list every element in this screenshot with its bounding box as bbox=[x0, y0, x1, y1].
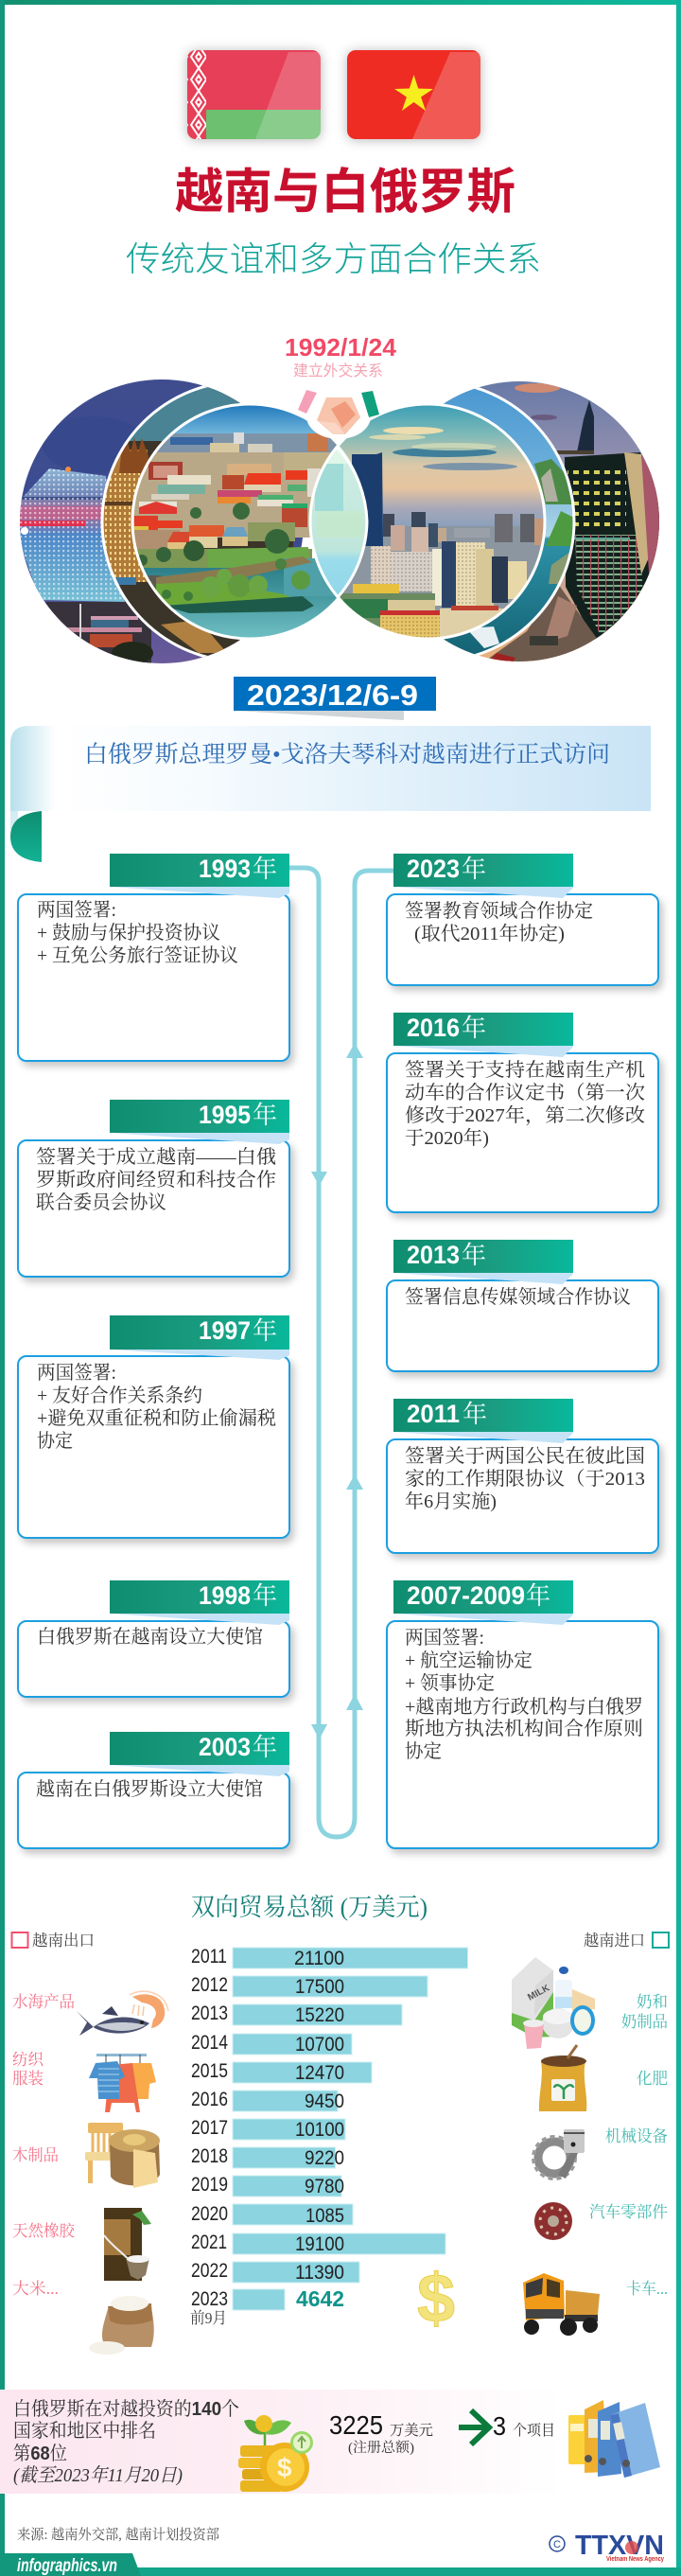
timeline 1997: 1997 bbox=[199, 1316, 251, 1345]
timeline 2011: 2011 bbox=[407, 1400, 460, 1428]
icon: clothes on rack bbox=[89, 2054, 156, 2112]
timeline 2011: 年6月实施) bbox=[405, 1491, 497, 1512]
chart title: two-way trade: 双向贸易总额 (万美元) bbox=[191, 1894, 428, 1921]
timeline 1997: + 友好合作关系条约 bbox=[37, 1385, 202, 1406]
timeline 2016: 年 bbox=[462, 1015, 486, 1042]
caption: establishing diplomatic relations: 建立外交关系 bbox=[293, 362, 383, 379]
bar chart: trade by year: 12470 bbox=[295, 2062, 344, 2084]
timeline 2023: 2023 bbox=[407, 855, 460, 883]
icon: fertilizer sack bbox=[539, 2045, 586, 2111]
timeline 2011: 年 bbox=[463, 1401, 487, 1428]
investment ranking text: 白俄罗斯在对越投资的140个 bbox=[13, 2398, 239, 2420]
flag: Belarus bbox=[187, 50, 321, 139]
timeline 2013 bbox=[387, 1240, 658, 1371]
timeline 1997: +避免双重征税和防止偷漏税 bbox=[37, 1407, 276, 1429]
import labels: 奶制品 bbox=[621, 2013, 668, 2031]
icon: dollar sign: $ bbox=[417, 2261, 455, 2337]
bar chart: trade by year: 9780 bbox=[305, 2176, 344, 2197]
timeline arrow line bbox=[289, 868, 393, 1837]
title: 越南与白俄罗斯 bbox=[175, 165, 515, 219]
bar chart: trade by year: 4642 bbox=[296, 2286, 344, 2311]
timeline 2007-2009: 两国签署: bbox=[405, 1627, 484, 1649]
timeline 1997: 年 bbox=[253, 1317, 277, 1345]
investment ranking text: (截至2023年11月20日) bbox=[13, 2464, 183, 2486]
bar chart: trade by year: 2012 bbox=[191, 1974, 228, 1996]
bar chart: trade by year bbox=[190, 1946, 467, 2327]
icon: binders bbox=[568, 2400, 660, 2478]
registered capital: (注册总额) bbox=[348, 2440, 414, 2456]
timeline 1995: 签署关于成立越南——白俄 bbox=[36, 1146, 276, 1168]
timeline 2023: (取代2011年协定) bbox=[414, 923, 565, 944]
timeline 1998: 白俄罗斯在越南设立大使馆 bbox=[37, 1626, 263, 1648]
timeline 1997: 协定 bbox=[37, 1430, 73, 1452]
timeline 2007-2009: +越南地方行政机构与白俄罗 bbox=[405, 1696, 643, 1718]
investment ranking text bbox=[13, 2398, 239, 2486]
logo: TTXVN: C bbox=[553, 2539, 561, 2550]
timeline 1993 bbox=[18, 854, 289, 1061]
bar chart: trade by year: 9450 bbox=[305, 2091, 344, 2112]
icon: handshake bbox=[298, 390, 379, 439]
export labels: 木制品 bbox=[12, 2146, 59, 2164]
bar chart: trade by year: 2019 bbox=[191, 2174, 228, 2196]
import labels: 机械设备 bbox=[605, 2127, 668, 2145]
legend: Vietnam exports: 越南出口 bbox=[32, 1932, 95, 1950]
timeline 2007-2009: 年 bbox=[526, 1582, 550, 1610]
bar chart: trade by year: 2020 bbox=[191, 2203, 228, 2225]
photo: lit Minsk building bbox=[100, 386, 293, 657]
date badge 2023/12/6-9: 2023/12/6-9 bbox=[247, 679, 418, 712]
bar chart: trade by year: 19100 bbox=[295, 2233, 344, 2255]
timeline 1997: 两国签署: bbox=[37, 1362, 116, 1384]
timeline 2007-2009: + 领事协定 bbox=[405, 1672, 495, 1694]
icon: wooden chair and stump bbox=[85, 2123, 160, 2188]
project count: 个项目 bbox=[513, 2422, 555, 2439]
timeline 2016: 动车的合作议定书（第一次 bbox=[405, 1082, 645, 1103]
bar chart: trade by year: 2015 bbox=[191, 2060, 228, 2082]
source note: 来源: 越南外交部, 越南计划投资部 bbox=[17, 2526, 219, 2543]
timeline 2023: 年 bbox=[462, 856, 486, 883]
timeline 2003 bbox=[18, 1732, 289, 1848]
arrow bbox=[459, 2410, 489, 2444]
subtitle: 传统友谊和多方面合作关系 bbox=[126, 239, 541, 278]
bar chart: trade by year: 前9月 bbox=[190, 2309, 227, 2327]
bar chart: trade by year: 1085 bbox=[306, 2205, 344, 2227]
bar chart: trade by year: 9220 bbox=[305, 2147, 344, 2169]
timeline 2007-2009: 协定 bbox=[405, 1740, 442, 1762]
import labels bbox=[589, 1993, 668, 2298]
timeline 2016: 2016 bbox=[407, 1014, 460, 1042]
timeline 2023 bbox=[387, 854, 658, 985]
icon: sack of rice bbox=[89, 2296, 154, 2355]
timeline 2011: 签署关于两国公民在彼此国 bbox=[405, 1445, 645, 1467]
project count: 3 bbox=[493, 2411, 506, 2441]
timeline 1997 bbox=[18, 1315, 289, 1538]
bar chart: trade by year: 10700 bbox=[295, 2034, 344, 2056]
icon: coins and plant bbox=[238, 2415, 313, 2492]
timeline 2016: 于2020年) bbox=[405, 1127, 489, 1149]
import labels: 化肥 bbox=[637, 2070, 668, 2088]
bar chart: trade by year: 10100 bbox=[295, 2119, 344, 2141]
timeline 1995: 年 bbox=[253, 1102, 277, 1129]
import labels: 奶和 bbox=[637, 1993, 668, 2011]
logo: TTXVN: Vietnam News Agency bbox=[606, 2556, 664, 2563]
bar chart: trade by year: 2018 bbox=[191, 2145, 228, 2167]
timeline 2003: 越南在白俄罗斯设立大使馆 bbox=[36, 1778, 263, 1800]
timeline 1993: + 互免公务旅行签证协议 bbox=[37, 944, 238, 966]
timeline 2007-2009 bbox=[387, 1580, 658, 1848]
banner: official visit: 白俄罗斯总理罗曼•戈洛夫琴科对越南进行正式访问 bbox=[84, 741, 610, 768]
bar chart: trade by year: 2014 bbox=[191, 2032, 228, 2054]
flag: Vietnam bbox=[347, 50, 480, 139]
bar chart: trade by year: 2023 bbox=[191, 2288, 228, 2310]
timeline 1998: 1998 bbox=[199, 1581, 251, 1610]
icon: dairy products bbox=[512, 1957, 595, 2049]
timeline 1995 bbox=[18, 1100, 289, 1277]
date 1992/1/24: 1992/1/24 bbox=[285, 333, 397, 362]
timeline 2013: 年 bbox=[462, 1242, 486, 1269]
timeline 2007-2009: + 航空运输协定 bbox=[405, 1650, 533, 1671]
timeline 2016: 签署关于支持在越南生产机 bbox=[405, 1059, 645, 1081]
icon: rubber tree bbox=[104, 2208, 151, 2281]
export labels: 水海产品 bbox=[12, 1993, 75, 2011]
timeline 2016 bbox=[387, 1013, 658, 1212]
timeline 2016: 修改于2027年，第二次修改 bbox=[405, 1104, 645, 1126]
legend: Vietnam imports: 越南进口 bbox=[584, 1932, 645, 1950]
timeline 2011: 家的工作期限协议（于2013 bbox=[405, 1468, 645, 1490]
icon: dairy products: MILK bbox=[526, 1983, 552, 2003]
icon: gear and piston bbox=[533, 2129, 585, 2179]
timeline 1995: 联合委员会协议 bbox=[36, 1191, 166, 1213]
bar chart: trade by year: 11390 bbox=[295, 2262, 344, 2284]
footer bar bbox=[0, 2567, 681, 2576]
bar chart: trade by year: 2021 bbox=[191, 2232, 227, 2253]
timeline 2011 bbox=[387, 1399, 658, 1553]
export labels: 服装 bbox=[12, 2070, 44, 2088]
panel: investment bbox=[0, 2390, 662, 2494]
registered capital bbox=[329, 2410, 433, 2456]
photo collage: Belarus and Vietnam cities bbox=[19, 379, 662, 668]
bar chart: trade by year: 17500 bbox=[295, 1976, 344, 1998]
photo: Hanoi skyline bbox=[340, 405, 543, 638]
registered capital: 3225 bbox=[329, 2410, 383, 2440]
timeline 1993: 两国签署: bbox=[37, 899, 116, 921]
timeline 2023: 签署教育领域合作协定 bbox=[405, 900, 593, 922]
banner: official visit bbox=[10, 726, 651, 862]
timeline 2013: 签署信息传媒领域合作协议 bbox=[405, 1286, 631, 1308]
investment ranking text: 国家和地区中排名 bbox=[13, 2420, 156, 2442]
timeline 1998 bbox=[18, 1580, 289, 1697]
logo: TTXVN: TTXVN bbox=[575, 2531, 664, 2561]
icon: fish and shrimp bbox=[77, 1991, 168, 2036]
timeline 1993: 年 bbox=[253, 856, 277, 883]
timeline 1993: + 鼓励与保护投资协议 bbox=[37, 922, 220, 944]
timeline 1995: 罗斯政府间经贸和科技合作 bbox=[36, 1169, 276, 1191]
bar chart: trade by year: 2022 bbox=[191, 2260, 228, 2282]
import labels: 汽车零部件 bbox=[589, 2203, 668, 2221]
timeline 1995: 1995 bbox=[199, 1101, 251, 1129]
export labels bbox=[12, 1993, 76, 2298]
bar chart: trade by year: 2017 bbox=[191, 2117, 228, 2139]
footer tab: infographics.vn: infographics.vn bbox=[17, 2556, 117, 2576]
investment ranking text: 第68位 bbox=[13, 2443, 67, 2464]
icon: coins and plant: $ bbox=[277, 2453, 292, 2482]
bar chart: trade by year: 15220 bbox=[295, 2004, 344, 2026]
timeline 1998: 年 bbox=[253, 1582, 277, 1610]
timeline 1993: 1993 bbox=[199, 855, 251, 883]
bar chart: trade by year: 2016 bbox=[191, 2089, 228, 2110]
import labels: 卡车... bbox=[626, 2280, 668, 2298]
timeline 2013: 2013 bbox=[407, 1241, 460, 1269]
timeline 2007-2009: 2007-2009 bbox=[407, 1581, 525, 1610]
icon: clutch disc bbox=[534, 2202, 572, 2240]
photo: Ha Long and sea bbox=[443, 381, 659, 662]
timeline 2003: 年 bbox=[253, 1734, 277, 1761]
registered capital: 万美元 bbox=[390, 2422, 433, 2439]
photo: Minsk library at night bbox=[19, 379, 305, 668]
date badge 2023/12/6-9 bbox=[234, 677, 436, 720]
photo: pale lens overlap bbox=[312, 447, 365, 594]
icon: dump truck bbox=[523, 2273, 600, 2336]
photo: Minsk old town panorama bbox=[134, 405, 337, 638]
export labels: 纺织 bbox=[12, 2051, 44, 2069]
bar chart: trade by year: 2013 bbox=[191, 2003, 228, 2024]
timeline 2003: 2003 bbox=[199, 1733, 251, 1761]
bar chart: trade by year: 21100 bbox=[294, 1948, 344, 1969]
export labels: 大米... bbox=[12, 2280, 59, 2298]
project count bbox=[493, 2411, 555, 2441]
bar chart: trade by year: 2011 bbox=[191, 1946, 227, 1967]
export labels: 天然橡胶 bbox=[12, 2222, 76, 2240]
timeline 2007-2009: 斯地方执法机构间合作原则 bbox=[405, 1718, 643, 1739]
